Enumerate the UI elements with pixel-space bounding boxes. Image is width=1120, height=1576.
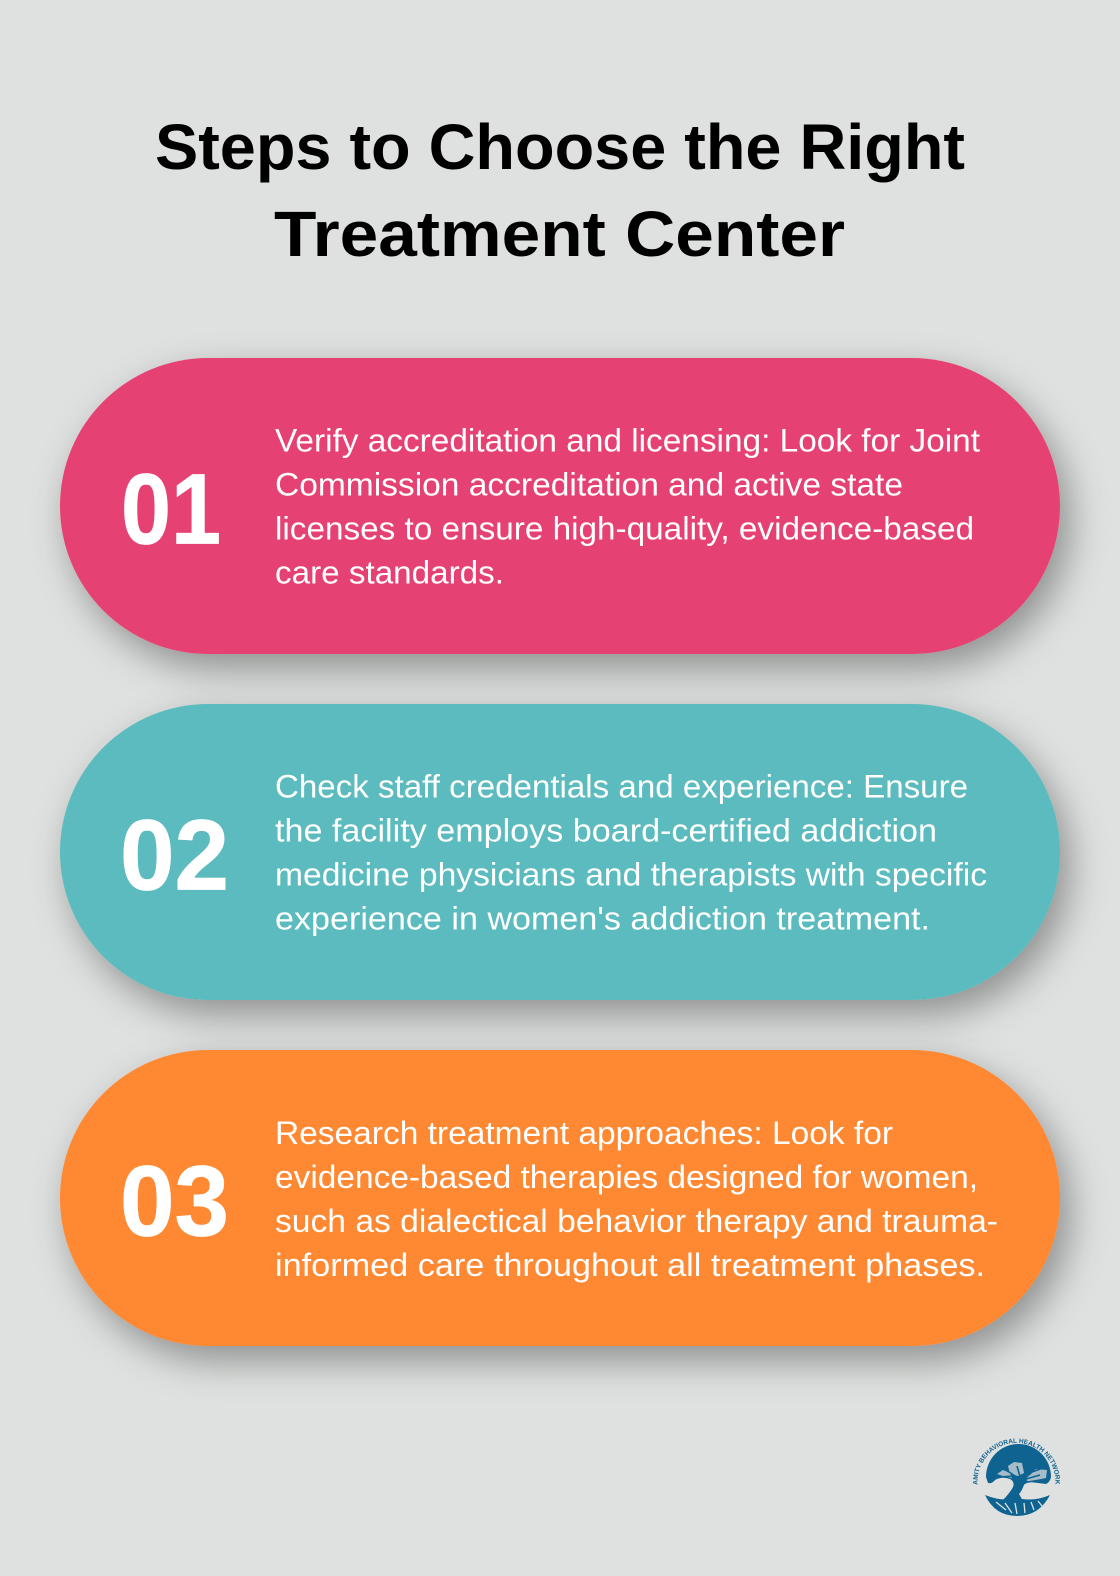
text block: step 03: Research treatment approaches: Look for	[275, 1115, 893, 1151]
panel: step 03	[60, 1050, 1060, 1346]
root crescent	[985, 1495, 1050, 1516]
pill background: step 03	[60, 1050, 1060, 1346]
text block: step 02: Check staff credentials and experience: Ensure	[275, 768, 968, 804]
text block: step 02: experience in women's addiction treatment.	[275, 900, 930, 936]
text block: step 01: licenses to ensure high-quality, evidence-based	[275, 510, 974, 546]
root gaps	[996, 1501, 1042, 1514]
canopy light patches	[997, 1462, 1047, 1481]
text block: step 02: the facility employs board-certified addiction	[275, 812, 937, 848]
icon: Amity Behavioral Health Network logo	[973, 1438, 1060, 1516]
text block: step 03	[275, 1115, 998, 1283]
pill background: step 02	[60, 704, 1060, 1000]
title: Steps to Choose the Right	[155, 111, 965, 183]
panel: step 01	[60, 358, 1060, 654]
text block: step 03: evidence-based therapies designed for women,	[275, 1159, 978, 1195]
text block: step 03: informed care throughout all treatment phases.	[275, 1247, 985, 1283]
tree canopy	[986, 1444, 1051, 1490]
title: Treatment Center	[274, 198, 845, 270]
text block: step 01	[275, 422, 980, 590]
text block: step 01: Commission accreditation and active state	[275, 466, 903, 502]
text block: step 01: Verify accreditation and licensing: Look for Joint	[275, 422, 980, 458]
number: 02: 02	[120, 800, 229, 912]
number: 03: 03	[120, 1146, 229, 1258]
text block: step 02	[275, 768, 987, 936]
text block: step 01: care standards.	[275, 554, 504, 590]
number: 01: 01	[121, 454, 221, 566]
panel: step 02	[60, 704, 1060, 1000]
tree branches	[1000, 1466, 1046, 1482]
tree trunk	[1002, 1477, 1026, 1501]
title	[155, 111, 965, 270]
text block: step 02: medicine physicians and therapists with specific	[275, 856, 987, 892]
text block: step 03: such as dialectical behavior therapy and trauma-	[275, 1203, 998, 1239]
logo ring text: AMITY BEHAVIORAL HEALTH NETWORK	[973, 1438, 1060, 1485]
pill background: step 01	[60, 358, 1060, 654]
